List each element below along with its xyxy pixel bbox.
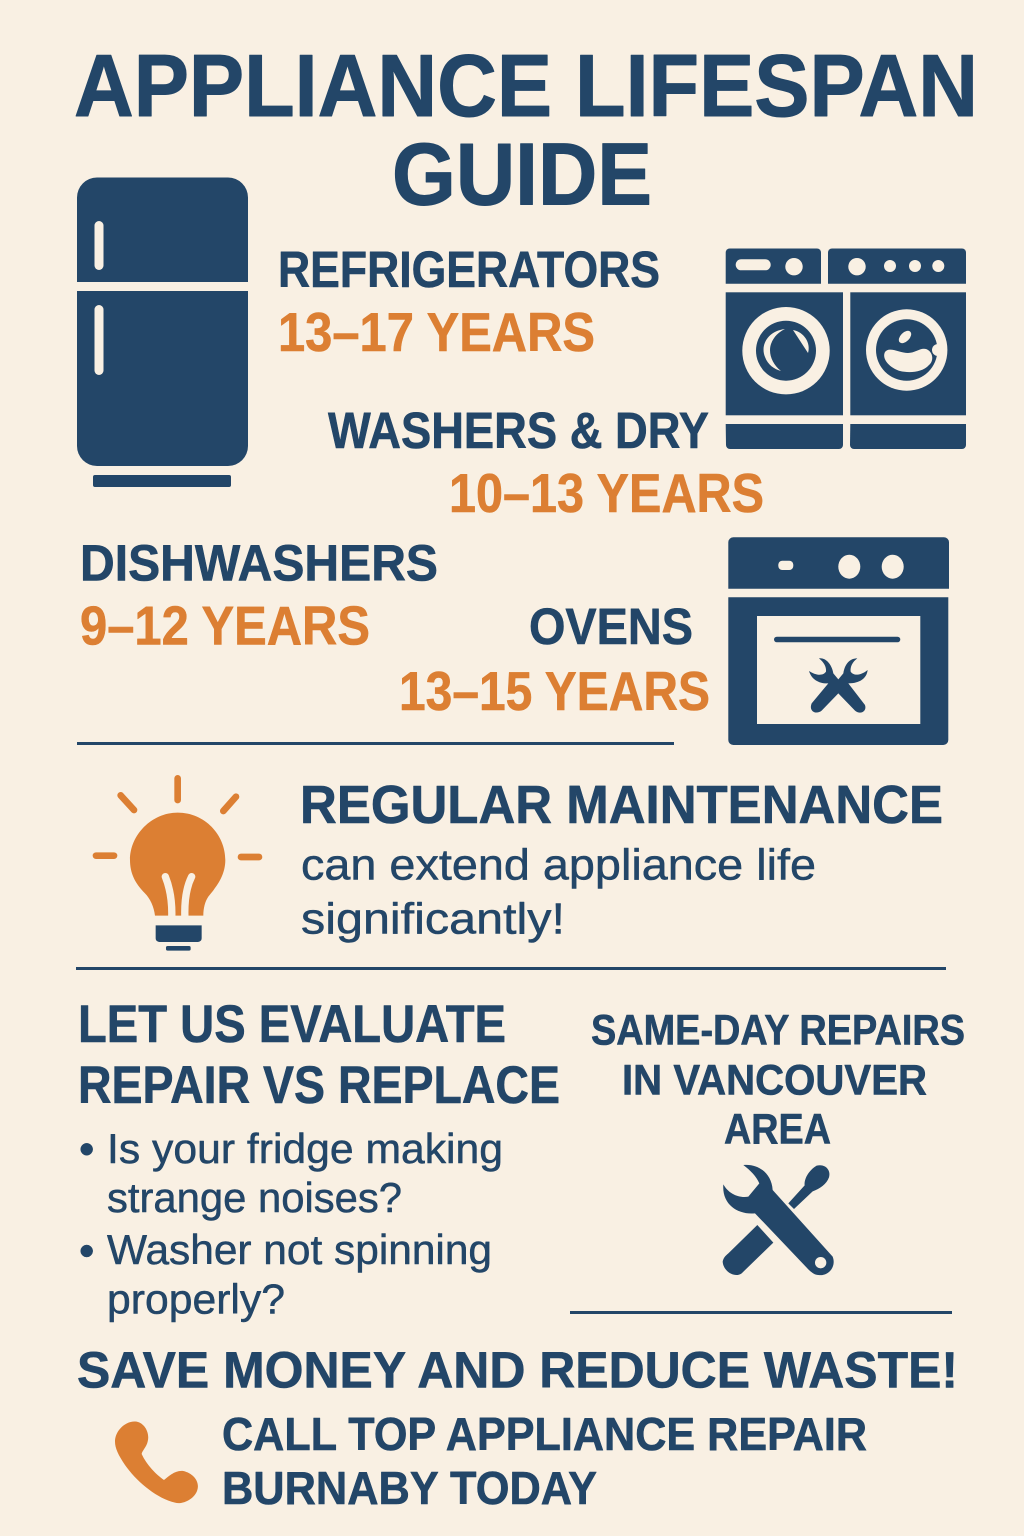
washers and dryers lifespan <box>328 402 764 524</box>
maintenance tip: REGULAR MAINTENANCE <box>300 775 943 835</box>
symptom bullet list: Washer not spinning <box>107 1226 492 1273</box>
icon: light bulb <box>96 778 259 951</box>
icon: wrench and screwdriver <box>723 1165 834 1275</box>
maintenance tip: significantly! <box>301 894 565 944</box>
call to action: BURNABY TODAY <box>222 1462 597 1514</box>
dishwashers lifespan: DISHWASHERS <box>80 534 438 592</box>
washers and dryers lifespan: 10–13 YEARS <box>449 463 764 524</box>
repair vs replace heading: LET US EVALUATE <box>78 995 506 1054</box>
ovens lifespan <box>399 598 710 722</box>
title <box>74 36 978 224</box>
washers and dryers lifespan: WASHERS & DRY <box>328 402 709 459</box>
call to action <box>222 1408 867 1514</box>
ovens lifespan: 13–15 YEARS <box>399 661 710 722</box>
dishwashers lifespan <box>80 534 438 656</box>
maintenance tip <box>300 775 943 944</box>
icon: refrigerator <box>77 178 248 487</box>
dishwashers lifespan: 9–12 YEARS <box>80 596 370 656</box>
icon: washer and dryer <box>726 248 966 449</box>
title: GUIDE <box>392 124 652 224</box>
refrigerators lifespan: 13–17 YEARS <box>278 302 595 363</box>
call to action: CALL TOP APPLIANCE REPAIR <box>222 1408 867 1460</box>
title: APPLIANCE LIFESPAN <box>74 36 978 135</box>
same-day repairs callout: AREA <box>724 1106 831 1154</box>
save money headline: SAVE MONEY AND REDUCE WASTE! <box>77 1342 958 1398</box>
symptom bullet list <box>81 1125 503 1322</box>
same-day repairs callout: IN VANCOUVER <box>622 1056 927 1104</box>
same-day repairs callout <box>591 1006 965 1154</box>
maintenance tip: can extend appliance life <box>301 840 816 890</box>
repair vs replace heading <box>78 995 560 1115</box>
symptom bullet list: properly? <box>107 1276 285 1322</box>
refrigerators lifespan <box>278 241 660 363</box>
icon: oven <box>728 537 949 745</box>
same-day repairs callout: SAME-DAY REPAIRS <box>591 1006 965 1054</box>
icon: phone <box>115 1421 198 1503</box>
symptom bullet list: Is your fridge making <box>107 1125 503 1172</box>
refrigerators lifespan: REFRIGERATORS <box>278 241 660 298</box>
repair vs replace heading: REPAIR VS REPLACE <box>78 1056 560 1115</box>
ovens lifespan: OVENS <box>529 598 693 655</box>
symptom bullet list: strange noises? <box>107 1174 402 1221</box>
